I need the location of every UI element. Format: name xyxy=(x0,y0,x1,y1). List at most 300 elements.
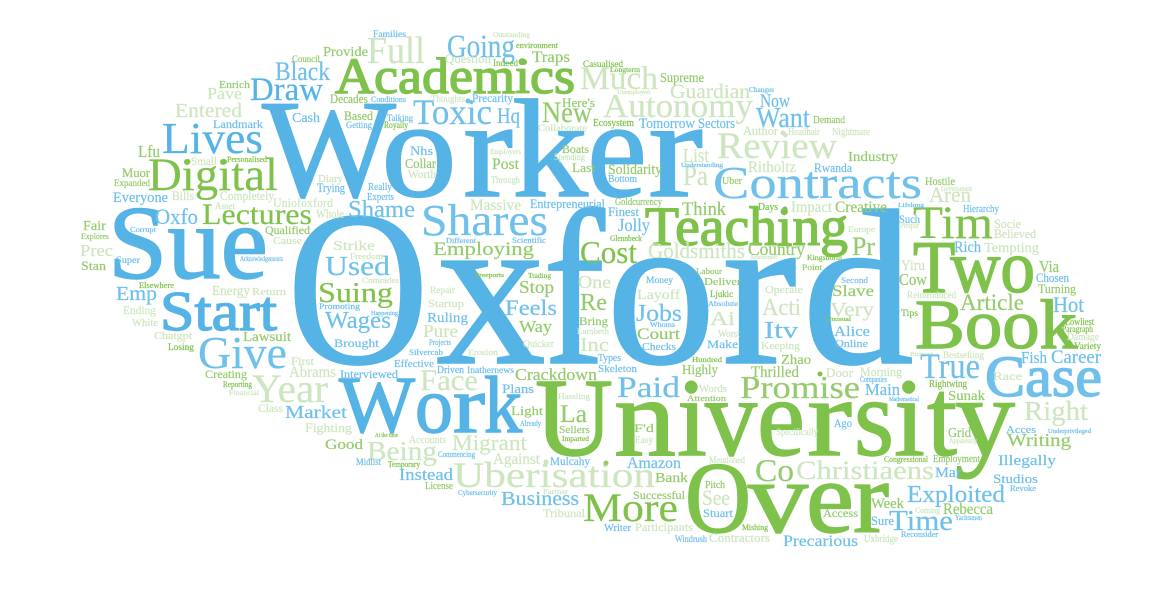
words: top left group: Black xyxy=(275,57,330,86)
word: University: t xyxy=(927,357,957,480)
words: top centre group: Getting xyxy=(346,120,372,130)
words: top left group: Diary xyxy=(318,174,343,185)
words: centre group: Skeleton xyxy=(598,363,638,375)
words: left group: Fair xyxy=(83,219,106,234)
words: left group: Losing xyxy=(168,342,195,352)
words: top centre group: Question xyxy=(445,51,491,66)
words: centre group xyxy=(394,236,741,404)
words: left group: Corrupt xyxy=(130,226,156,234)
words: top right group: Jolly xyxy=(618,215,650,235)
words: top right group: Demand xyxy=(813,114,845,126)
words: left group: Stan xyxy=(81,258,107,273)
words: top left group: Landmark xyxy=(213,117,263,131)
words: top right group: Supreme xyxy=(660,71,704,86)
words: centre group: Trading xyxy=(528,272,552,280)
words: top right group: Think xyxy=(682,199,726,220)
words: bottom centre group: Hassling xyxy=(558,392,590,401)
word: Worker: e xyxy=(587,72,647,227)
words: top centre group: Nhs xyxy=(410,143,433,158)
words: left group: Good xyxy=(325,437,364,453)
words: left group: Energy xyxy=(212,284,250,299)
words: left group: Elsewhere xyxy=(139,281,174,290)
word: Oxford: r xyxy=(722,166,797,412)
words: inside the d of Oxford: Aristocratic xyxy=(750,255,778,261)
words: top centre group: Employers xyxy=(490,148,521,156)
words: inside the d of Oxford: Keeping xyxy=(761,340,801,352)
word: University: n xyxy=(614,357,676,480)
words: bottom right group: Ago xyxy=(834,416,852,430)
words: centre group: Inathernews xyxy=(467,365,515,375)
word: Worker: o xyxy=(381,72,457,227)
words: top right group: Guardian xyxy=(670,81,750,103)
words: right group: Career xyxy=(1051,347,1102,368)
words: top right group: Changes xyxy=(749,86,774,94)
words: top left group: Enrich xyxy=(219,79,251,91)
words: bottom centre group: Imparted xyxy=(562,435,590,443)
words: right group: Revoke xyxy=(1010,484,1036,493)
words: centre group: Hundred xyxy=(692,356,723,364)
words: right group: Right xyxy=(1024,396,1089,426)
words: inside the d of Oxford: Itv xyxy=(764,318,798,344)
words: right group: Studios xyxy=(993,471,1038,486)
words: centre group: Make xyxy=(707,337,738,351)
words: bottom centre group: Partner xyxy=(543,488,569,496)
words: centre group: Whoms xyxy=(650,321,675,329)
words: centre group: Inc xyxy=(580,335,609,356)
words: top right group: Rwanda xyxy=(814,160,852,175)
words: bottom centre group: Against xyxy=(493,451,541,468)
words: bottom right group: Companies xyxy=(860,375,887,384)
words: right group: Via xyxy=(1039,257,1059,276)
word: University: e xyxy=(757,357,805,480)
word: Uberisation: Uberisation xyxy=(453,455,655,495)
word: Start: Start xyxy=(160,281,277,343)
words: top centre group: Here's xyxy=(562,95,595,110)
word: University: s xyxy=(854,357,894,480)
words: centre group: Freeports xyxy=(475,273,505,279)
words: inside the d of Oxford: Europe xyxy=(848,225,876,234)
word: University: y xyxy=(955,357,1016,480)
words: left group: Ending xyxy=(123,303,156,317)
words: top right group: Unemployed xyxy=(617,90,650,96)
words: top left group: Muor xyxy=(122,165,151,180)
words: top right group: Understanding xyxy=(681,163,723,169)
words: centre group: Layoff xyxy=(637,288,680,303)
words: bottom centre group: See xyxy=(702,485,730,510)
word: Over: v xyxy=(748,442,808,555)
words: top centre group: Families xyxy=(373,29,407,39)
word: Give: Give xyxy=(198,327,287,378)
words: top right group: Government xyxy=(941,185,972,193)
words: bottom centre group: Plans xyxy=(502,381,534,396)
words: bottom centre group: Mentioned xyxy=(709,455,745,465)
words: centre group: Re xyxy=(580,290,607,316)
words: bottom right group xyxy=(751,364,1005,550)
words: left group: Qualified xyxy=(265,223,310,237)
words: bottom right group: Reconsider xyxy=(901,530,938,539)
words: bottom centre group: Mishing xyxy=(742,523,768,532)
words: top left group: Everyone xyxy=(113,190,168,206)
words: inside the d of Oxford: Kingsnorth xyxy=(807,254,843,262)
words: top centre group: Worth xyxy=(408,167,436,181)
words: top centre group: Entrepreneurial xyxy=(530,196,605,211)
words: centre group: Driven xyxy=(437,365,464,376)
words: centre group: Deliver xyxy=(704,276,741,288)
words: right group: Cow xyxy=(899,270,928,289)
word: Digital: Digital xyxy=(148,149,278,201)
words: centre group: Jobs xyxy=(636,301,682,327)
words: centre group: Labour xyxy=(696,267,722,276)
words: right group: Yiru xyxy=(901,258,925,274)
word: Oxford: o xyxy=(606,166,716,412)
words: top centre group: Longterm xyxy=(610,66,641,74)
words: right group: Article xyxy=(960,290,1024,315)
words: top right group: Now xyxy=(760,91,790,112)
words: bottom centre group: Migrant xyxy=(452,430,527,455)
words: centre group: Feels xyxy=(505,295,557,320)
words: centre group: Quicker xyxy=(523,339,555,350)
words: top right group: Ritholtz xyxy=(748,159,796,176)
words: left group: Lawsuit xyxy=(243,330,291,345)
words: left group: White xyxy=(132,318,159,329)
words: left group: Fighting xyxy=(305,420,353,435)
word: Oxford: O xyxy=(287,166,429,412)
words: top right group: Goldsmiths xyxy=(648,238,745,263)
words: bottom right group: Door xyxy=(826,365,854,380)
words: bottom right group: Specifically xyxy=(776,427,818,437)
words: top right group: Want xyxy=(756,103,810,134)
words: top right group: Solidarity xyxy=(608,162,662,178)
words: bottom right group: Uxbridge xyxy=(864,534,898,545)
words: right group: Burnout xyxy=(910,352,933,358)
words: top centre group: Talking xyxy=(387,113,413,123)
words: bottom right group: Exploited xyxy=(907,482,1005,508)
words: centre group: Absolute xyxy=(708,300,738,308)
words: bottom centre group: Windrush xyxy=(675,534,707,544)
words: top right group: Sectors xyxy=(698,116,735,132)
words: top right group: List xyxy=(683,145,709,167)
words: centre group: Ljukic xyxy=(710,289,733,299)
words: inside the O of Oxford: Happening xyxy=(371,311,398,317)
words: bottom right group: Precarious xyxy=(783,533,858,550)
words: left group: Cybersecurity xyxy=(458,489,497,497)
words: bottom centre group: Mulcahy xyxy=(550,454,590,468)
words: top left group: Personalised xyxy=(227,155,267,164)
words: top right group: Impact xyxy=(791,199,833,216)
words: inside the d of Oxford xyxy=(750,225,876,368)
words: right group: Socie xyxy=(994,216,1021,231)
words: bottom centre group: Easy xyxy=(635,435,654,445)
words: top centre group: Full xyxy=(367,30,425,72)
word: Over: r xyxy=(853,442,889,555)
words: right group: Underprivileged xyxy=(1048,429,1091,435)
words: top left group: Cash xyxy=(292,111,320,126)
words: left group: Financial xyxy=(229,389,259,397)
words: top centre group xyxy=(330,29,641,223)
words: bottom right group: Yachtsmen xyxy=(955,514,982,522)
words: top left group: Expanded xyxy=(114,178,150,188)
words: right group: Tempting xyxy=(984,241,1039,256)
word: Oxford: x xyxy=(436,166,546,412)
words: left group: Market xyxy=(285,402,347,422)
words: top centre group: Toxic xyxy=(413,92,492,132)
word: Year: Year xyxy=(252,366,328,411)
word: Worker: r xyxy=(463,72,513,227)
words: left group: Prec xyxy=(80,241,113,260)
word: Work: o xyxy=(415,362,453,450)
words: top centre group: Conditions xyxy=(371,95,406,104)
words: top left group: Uniofoxford xyxy=(273,195,333,210)
words: bottom centre group: Already xyxy=(520,419,541,428)
words: centre group: Scientific xyxy=(512,236,546,245)
words: top centre group: Through xyxy=(491,175,520,185)
word: Work: W xyxy=(339,362,415,450)
words: bottom right group: Co xyxy=(755,452,794,488)
words: top right group: Hostile xyxy=(925,174,955,188)
word: Christiaens: Christiaens xyxy=(796,456,934,485)
words: right group: Writing xyxy=(1007,430,1071,450)
words: top centre group: Royally xyxy=(384,120,408,130)
words: bottom right group: Time xyxy=(889,506,953,537)
words: right group: Race xyxy=(993,369,1022,383)
words: inside the O of Oxford xyxy=(318,239,399,350)
word: Two: Two xyxy=(913,227,1035,309)
words: left group xyxy=(80,219,497,497)
words: inside the O of Oxford: Brought xyxy=(334,336,380,350)
words: top left group: Small xyxy=(191,154,218,168)
words: inside the d of Oxford: Very xyxy=(830,299,874,321)
words: centre group: Bring xyxy=(579,314,608,328)
words: inside the d of Oxford: Online xyxy=(835,338,868,350)
words: bottom centre group: Amazon xyxy=(627,455,681,472)
words: centre group: Ai xyxy=(710,308,736,330)
words: bottom right group: Mar xyxy=(935,465,961,481)
words: top left group: Asset xyxy=(215,201,235,211)
word: University: U xyxy=(535,357,613,480)
word: University: i xyxy=(894,357,925,480)
words: centre group: Ruling xyxy=(427,311,468,326)
words: left group: Face xyxy=(420,364,478,397)
words: centre group: Different xyxy=(446,237,476,245)
words: top right group: Ecosystem xyxy=(593,118,634,129)
word: Worker: r xyxy=(648,72,703,227)
words: top centre group: Traps xyxy=(532,49,570,66)
word: Contracts: Contracts xyxy=(713,157,922,208)
words: top centre group: Indeed xyxy=(493,58,518,68)
words: top centre group: New xyxy=(542,96,592,129)
words: top left group: Pave xyxy=(207,84,242,103)
words: top right group: Country xyxy=(748,239,805,259)
word: Review: Review xyxy=(717,126,837,167)
words: top left group: Trying xyxy=(317,180,345,195)
words: bottom right group: Coming xyxy=(915,506,940,515)
words: right group: Paragraph xyxy=(1062,324,1093,334)
words: inside the d of Oxford: Acti xyxy=(762,295,801,321)
words: bottom right group: Congressional xyxy=(884,455,929,464)
word: Oxford: f xyxy=(543,166,605,412)
words: right group: Lowliest xyxy=(1065,317,1094,328)
words: inside the O of Oxford: Strike xyxy=(333,239,375,254)
words: bottom centre group: Bank xyxy=(655,471,688,486)
words: inside the d of Oxford: Alice xyxy=(834,324,870,340)
words: bottom right group: Access xyxy=(823,506,858,520)
words: left group: Explores xyxy=(81,232,109,241)
words: inside the d of Oxford: Pr xyxy=(852,232,875,261)
words: bottom centre group: Pitch xyxy=(705,480,725,491)
words: inside the O of Oxford: Freedom xyxy=(350,252,384,261)
words: top centre group: Boats xyxy=(562,142,589,156)
word: Lives: Lives xyxy=(162,114,263,163)
words: top right group: Bottom xyxy=(608,174,637,185)
words: bottom centre group: Business xyxy=(501,488,579,510)
words: top left group: Oxfo xyxy=(155,204,198,229)
word: University: r xyxy=(807,357,852,480)
words: right group xyxy=(899,212,1102,493)
words: bottom centre group: Successful xyxy=(633,488,686,502)
words: left group: First xyxy=(291,354,315,368)
words: left group: Emp xyxy=(116,283,157,305)
words: inside the d of Oxford: Operate xyxy=(765,284,803,296)
word: University: v xyxy=(705,357,757,480)
words: centre group: Erosion xyxy=(468,348,498,357)
words: top right group: Creative xyxy=(835,199,887,216)
words: right group: Turning xyxy=(1038,281,1076,296)
words: inside the O of Oxford: Comrades xyxy=(362,276,399,285)
words: centre group: Projects xyxy=(429,338,451,347)
words: left group: Return xyxy=(252,286,287,298)
words: inside the O of Oxford: Wages xyxy=(325,308,391,334)
words: centre group: Worst xyxy=(718,329,740,340)
word: Case: Case xyxy=(985,344,1102,409)
words: top right group: Goldcurrency xyxy=(615,197,662,208)
words: centre group: Crackdown xyxy=(515,365,598,384)
words: centre group: Stop xyxy=(519,277,554,297)
words: top left group: Provide xyxy=(323,45,368,60)
words: right group: Damage xyxy=(1067,332,1100,343)
words: right group: Believed xyxy=(994,226,1036,241)
word: Sue: Sue xyxy=(108,184,268,301)
words: top centre group: environment xyxy=(516,41,559,50)
words: right group: Variety xyxy=(1074,341,1102,351)
words: centre group: Effective xyxy=(394,358,434,370)
words: right group: Such xyxy=(899,212,920,226)
words: top centre group: Last xyxy=(572,160,595,175)
word: Autonomy: Autonomy xyxy=(603,88,753,125)
words: bottom right group: Employment xyxy=(933,454,980,465)
words: inside the O of Oxford: Promoting xyxy=(319,302,360,311)
words: top right group: Tomorrow xyxy=(639,116,695,132)
words: left group: Instead xyxy=(399,465,454,484)
words: top centre group: Precarity xyxy=(472,91,513,105)
words: centre group: Highly xyxy=(682,363,718,378)
words: left group: Accounts xyxy=(409,435,446,446)
words: top centre group: Experts xyxy=(367,191,394,203)
words: centre group: Repair xyxy=(430,285,455,295)
words: bottom centre group: Sellers xyxy=(559,424,590,436)
words: left group: Super xyxy=(116,255,140,265)
words: top left group: Completely xyxy=(220,188,274,203)
words: top centre group: Outstanding xyxy=(493,31,531,39)
words: bottom right group: Rightwing xyxy=(929,379,967,390)
words: bottom right group: Morning xyxy=(860,364,902,379)
words: centre group: One xyxy=(578,272,611,292)
words: top right group: Finest xyxy=(608,204,639,219)
words: centre group: Silvercab xyxy=(409,348,443,357)
words: bottom right group: Sure xyxy=(871,513,894,528)
words: left group: Chatgpt xyxy=(154,330,192,342)
words: centre group: Money xyxy=(646,275,674,285)
words: top right group: Days xyxy=(758,202,778,213)
words: right group: Fish xyxy=(1021,348,1047,367)
words: centre group: Paid xyxy=(617,371,680,404)
words: top centre group: Going xyxy=(447,29,515,65)
words: bottom centre group: Light xyxy=(511,403,543,418)
words: bottom right group: Rebecca xyxy=(943,501,993,518)
words: top left group: Council xyxy=(292,54,320,64)
words: bottom centre group: Contractors xyxy=(709,530,770,545)
words: inside the d of Oxford: Second xyxy=(841,276,868,285)
words: top right group: Hierarchy xyxy=(963,203,999,215)
words: top right group: Cost xyxy=(580,234,637,270)
words: top right group: Pa xyxy=(683,161,709,192)
words: top right group: Nightmare xyxy=(832,126,870,138)
word: Promise: Promise xyxy=(740,369,860,405)
words: top centre group: Thoughts xyxy=(431,94,465,104)
word: University: i xyxy=(677,357,707,480)
words: top left group: Bills xyxy=(172,188,194,203)
word: Academics: Academics xyxy=(335,49,575,105)
words: top centre group: Collaborate xyxy=(538,123,587,133)
words: top right group: Author xyxy=(743,123,779,138)
words: top centre group: Shame xyxy=(348,197,415,223)
words: top right group: Headhair xyxy=(788,127,821,138)
words: left group: Being xyxy=(367,436,437,466)
word: Work: k xyxy=(484,362,522,450)
word: Tim: Tim xyxy=(913,197,993,249)
words: centre group: Types xyxy=(598,353,621,364)
words: top left group xyxy=(113,45,368,231)
words: left group: Abrams xyxy=(289,364,336,381)
words: right group: Chosen xyxy=(1036,270,1069,285)
words: bottom centre group: Writer xyxy=(604,523,632,534)
words: bottom centre group: Stuart xyxy=(703,506,734,520)
words: top centre group: Casualised xyxy=(583,59,624,69)
words: bottom right group: Apparently xyxy=(949,437,977,445)
words: bottom right group: Mathematical xyxy=(889,397,919,403)
words: centre group: Attention xyxy=(687,394,726,403)
words: bottom centre group: La xyxy=(560,401,587,428)
words: top centre group: Massive xyxy=(470,197,521,214)
words: right group: Rich xyxy=(954,239,981,256)
words: centre group: Court xyxy=(637,326,681,343)
words: left group: Cause xyxy=(273,235,302,247)
words: centre group: Lambeth xyxy=(577,327,609,336)
words: left group: At the time xyxy=(375,433,398,439)
words: left group: Class xyxy=(258,401,283,415)
words: right group: Acces xyxy=(1006,424,1036,436)
word: Book: Book xyxy=(915,287,1077,364)
words: top right group xyxy=(580,61,999,270)
word: Over: O xyxy=(685,442,751,555)
words: right group: Bestselling xyxy=(943,350,985,360)
words: centre group: Way xyxy=(519,317,553,336)
words: left group: Reporting xyxy=(223,380,252,389)
word: More: More xyxy=(583,485,678,530)
words: right group: People xyxy=(900,221,919,230)
words: centre group: Startup xyxy=(428,298,465,310)
words: left group: Midlist xyxy=(356,457,381,467)
words: top left group: Entered xyxy=(175,100,242,122)
